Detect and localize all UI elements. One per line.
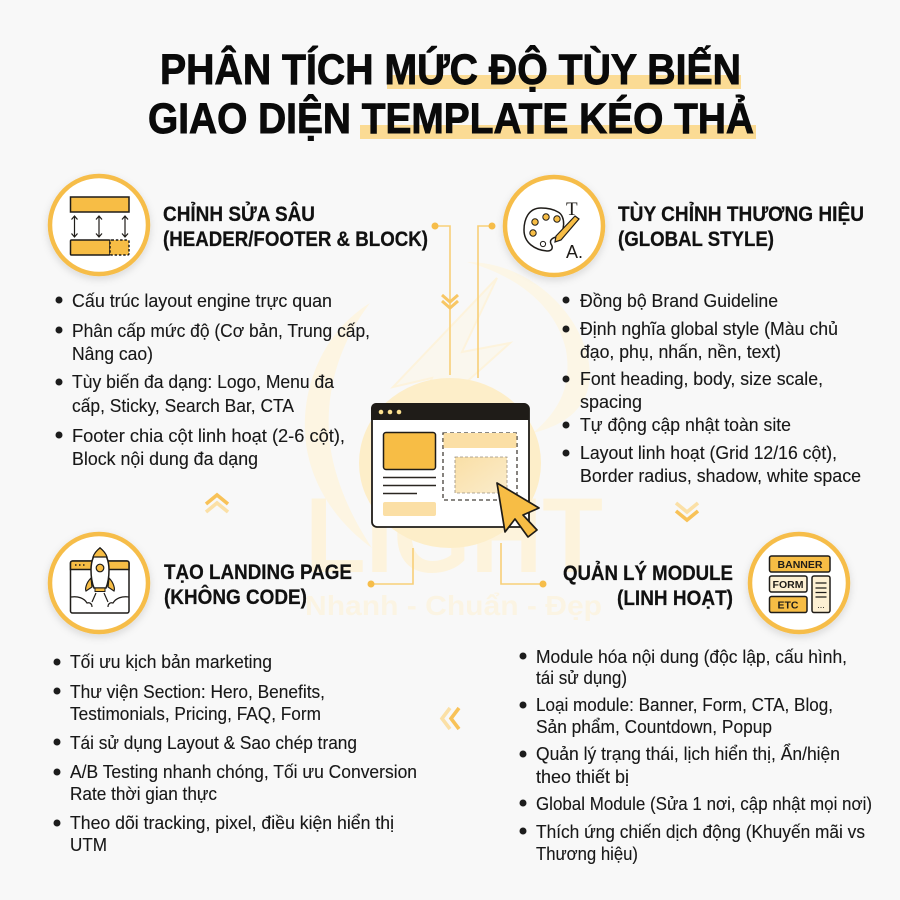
bullet list: [520, 647, 872, 864]
arrow: chevrons down right: [676, 503, 698, 520]
bullet list: Định nghĩa global style (Màu chủ: [580, 319, 838, 339]
heading: [618, 202, 864, 251]
heading: (LINH HOẠT): [617, 587, 733, 610]
heading: CHỈNH SỬA SÂU: [163, 202, 315, 226]
title: GIAO DIỆN TEMPLATE KÉO THẢ: [148, 94, 754, 143]
arrow: chevrons down centre: [442, 295, 458, 308]
heading: (KHÔNG CODE): [164, 585, 307, 609]
bullet list: Font heading, body, size scale,: [580, 369, 823, 389]
icon: mouse cursor: [497, 483, 539, 537]
icon: palette and type: [505, 177, 603, 275]
icon: module blocks: FORM: [773, 579, 804, 591]
bullet list: Layout linh hoạt (Grid 12/16 cột),: [580, 443, 837, 463]
bullet list: Testimonials, Pricing, FAQ, Form: [70, 704, 321, 724]
icon: module blocks: BANNER: [778, 559, 823, 571]
arrow: chevrons up left: [206, 495, 228, 512]
panel: quản lý module: [520, 534, 872, 864]
arrow: chevrons left bottom: [442, 708, 459, 729]
bullet list: Theo dõi tracking, pixel, điều kiện hiển thị: [70, 813, 394, 833]
heading: TẠO LANDING PAGE: [164, 561, 352, 584]
panel: tạo landing page: [50, 534, 417, 855]
bullet list: Block nội dung đa dạng: [72, 449, 258, 469]
bullet list: spacing: [580, 392, 642, 412]
bullet list: Sản phẩm, Countdown, Popup: [536, 717, 772, 737]
bullet list: Loại module: Banner, Form, CTA, Blog,: [536, 695, 833, 715]
connector: bottom left: [368, 548, 413, 588]
bullet list: cấp, Sticky, Search Bar, CTA: [72, 396, 294, 416]
bullet list: Cấu trúc layout engine trực quan: [72, 291, 332, 311]
bullet list: Module hóa nội dung (độc lập, cấu hình,: [536, 647, 847, 667]
connector: bottom right: [501, 543, 546, 588]
bullet list: Thư viện Section: Hero, Benefits,: [70, 682, 325, 702]
bullet list: [54, 652, 417, 855]
heading: [163, 202, 428, 251]
connector: top left: [432, 222, 450, 375]
icon: rocket launch: [50, 534, 148, 632]
icon: module blocks: ETC: [778, 600, 799, 612]
bullet list: Tự động cập nhật toàn site: [580, 415, 791, 435]
icon: module blocks: [750, 534, 848, 632]
title: PHÂN TÍCH MỨC ĐỘ TÙY BIẾN: [160, 45, 741, 94]
heading: [563, 561, 733, 610]
heading: TÙY CHỈNH THƯƠNG HIỆU: [618, 202, 864, 226]
bullet list: Global Module (Sửa 1 nơi, cập nhật mọi nơi): [536, 794, 872, 814]
bullet list: Phân cấp mức độ (Cơ bản, Trung cấp,: [72, 321, 370, 341]
title: [148, 45, 756, 143]
bullet list: Tái sử dụng Layout & Sao chép trang: [70, 733, 357, 753]
bullet list: đạo, phụ, nhấn, nền, text): [580, 342, 781, 362]
watermark logo: [305, 262, 603, 621]
bullet list: Đồng bộ Brand Guideline: [580, 291, 778, 311]
bullet list: Tùy biến đa dạng: Logo, Menu đa: [72, 372, 335, 392]
heading: QUẢN LÝ MODULE: [563, 561, 733, 585]
panel: chỉnh sửa sâu: [50, 176, 428, 469]
panel: tùy chỉnh thương hiệu: [505, 177, 864, 486]
heading: (HEADER/FOOTER & BLOCK): [163, 228, 428, 251]
bullet list: Quản lý trạng thái, lịch hiển thị, Ẩn/hiện: [536, 743, 840, 764]
icon: palette and type: T: [566, 199, 578, 220]
heading: [164, 561, 352, 609]
bullet list: Thích ứng chiến dịch động (Khuyến mãi vs: [536, 822, 865, 842]
bullet list: Nâng cao): [72, 344, 153, 364]
heading: (GLOBAL STYLE): [618, 228, 774, 251]
bullet list: Thương hiệu): [536, 844, 638, 864]
bullet list: Rate thời gian thực: [70, 784, 217, 804]
bullet list: A/B Testing nhanh chóng, Tối ưu Conversion: [70, 762, 417, 782]
bullet list: UTM: [70, 835, 107, 855]
icon: layout blocks: [50, 176, 148, 274]
icon: module blocks: ...: [817, 600, 825, 610]
connector: top right: [478, 222, 496, 378]
watermark logo: Nhanh - Chuẩn - Đẹp: [305, 590, 602, 621]
bullet list: Border radius, shadow, white space: [580, 466, 861, 486]
bullet list: tái sử dụng): [536, 668, 627, 688]
watermark logo: LIGHT: [305, 475, 603, 595]
bullet list: [562, 291, 861, 486]
bullet list: theo thiết bị: [536, 767, 629, 787]
bullet list: Tối ưu kịch bản marketing: [70, 652, 272, 672]
bullet list: Footer chia cột linh hoạt (2-6 cột),: [72, 426, 345, 446]
bullet list: [56, 291, 370, 469]
icon: palette and type: A.: [566, 242, 583, 262]
central browser window illustration: [371, 403, 539, 537]
